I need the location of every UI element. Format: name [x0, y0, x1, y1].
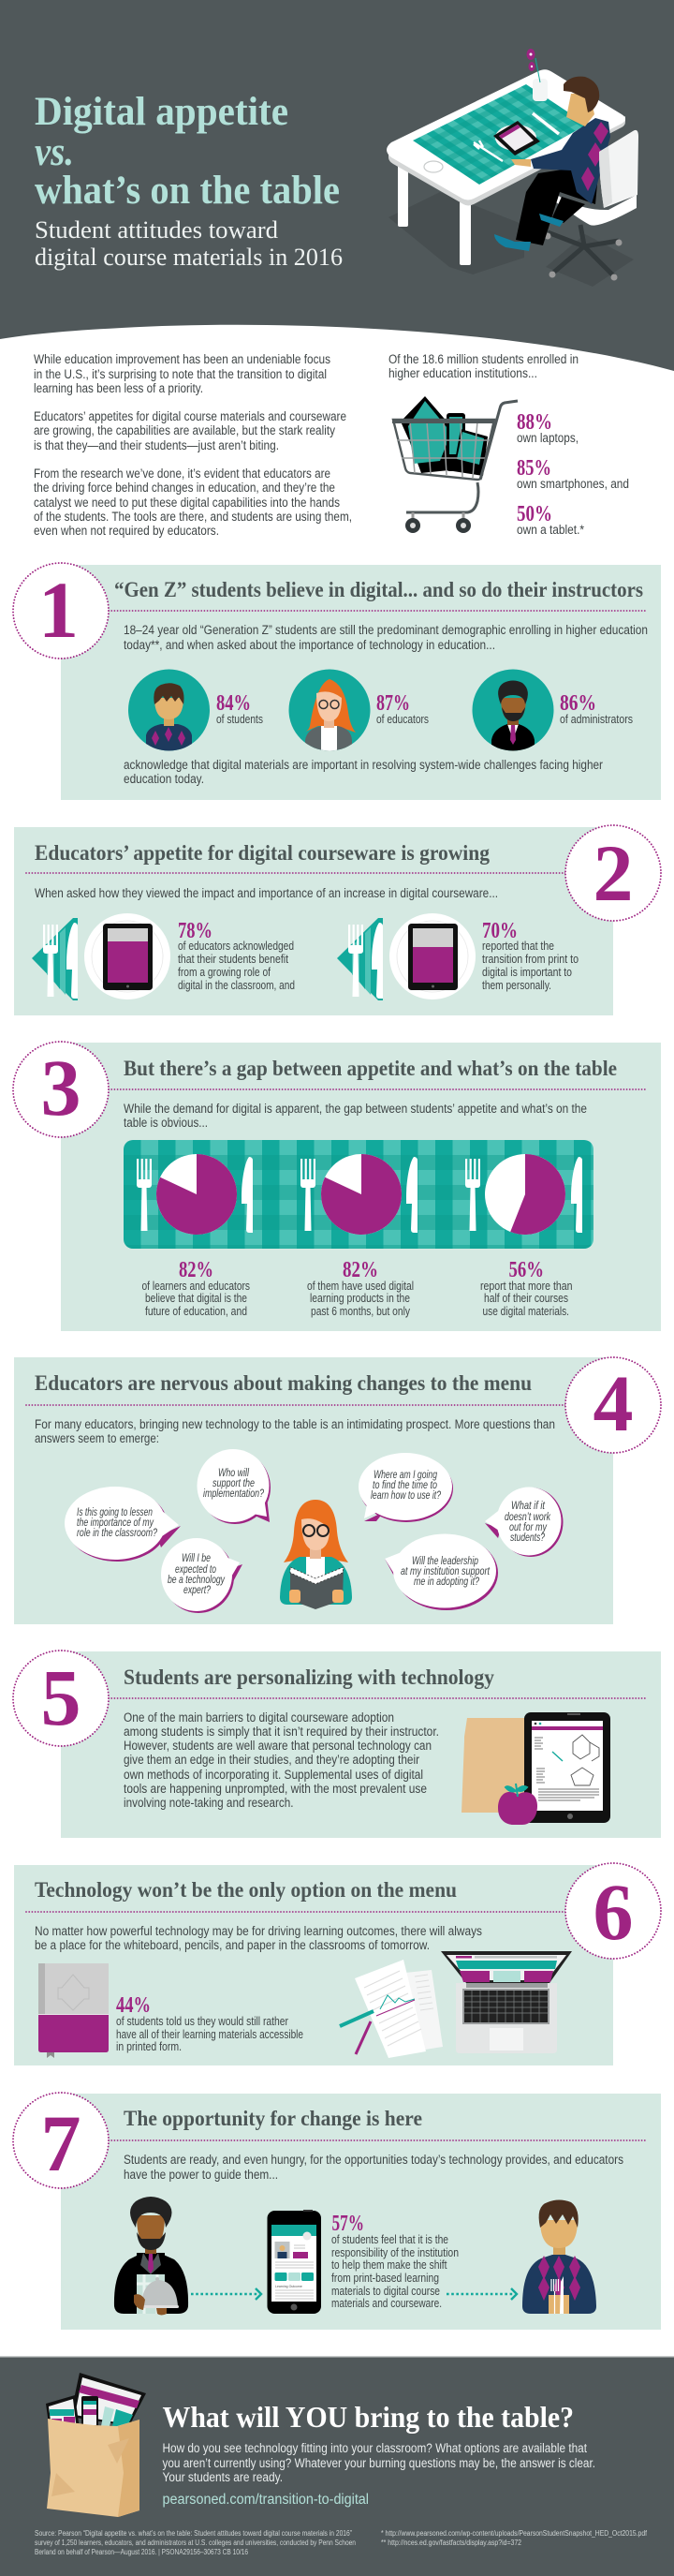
intro text block: in the U.S., it’s surprising to note that the transition to digital — [34, 367, 327, 381]
arrow: waiter to phone — [191, 2288, 261, 2300]
speech bubble: technology expert: expert? — [183, 1583, 211, 1596]
number badge 7: 7 — [41, 2098, 81, 2188]
number badge 3: 3 — [41, 1043, 81, 1133]
stat: 70% reported: transition from print to — [482, 952, 579, 966]
intro text block — [34, 352, 352, 538]
stat: 82% of learners: 82% — [179, 1258, 213, 1282]
stat: 78% of educators: of educators acknowledged — [178, 939, 294, 953]
icon: educator reading book — [280, 1500, 352, 1609]
icon: student avatar — [128, 669, 210, 751]
stat: 70% reported: digital is important to — [482, 965, 572, 979]
call to action heading: What will YOU bring to the table? — [163, 2400, 574, 2434]
icon: grocery bag with devices — [46, 2373, 146, 2517]
stat: 44% of students: have all of their learning materials accessible — [116, 2027, 303, 2041]
stat: 57% of students: responsibility of the institution — [331, 2245, 459, 2259]
icon: administrator avatar — [472, 669, 554, 751]
stat: 56% report: 56% — [509, 1258, 544, 1282]
stat: 82% used digital: 82% — [343, 1258, 378, 1282]
stat: 57% of students: materials to digital course — [331, 2284, 440, 2298]
icon: educator avatar — [288, 669, 371, 751]
heading: Students are personalizing with technology — [124, 1666, 494, 1689]
number badge 5 — [13, 1651, 109, 1746]
arrow: phone to student — [447, 2288, 517, 2300]
stat: 57% of students: 57% — [331, 2212, 364, 2236]
closing text: education today. — [124, 772, 204, 786]
stat: 82% used digital: past 6 months, but only — [311, 1304, 410, 1318]
speech bubble: find the time: learn how to use it? — [371, 1488, 441, 1502]
stat: 44% of students — [116, 1993, 303, 2053]
stat: 84% of students — [216, 691, 263, 726]
speech bubble: who will support — [197, 1449, 271, 1524]
speech bubble: find the time: to find the time to — [373, 1478, 437, 1491]
intro text: today**, and when asked about the importance of technology in education... — [124, 638, 495, 652]
stat: 70% reported: 70% — [482, 919, 518, 943]
intro text block: While education improvement has been an undeniable focus — [34, 352, 330, 366]
speech bubble: importance of role: the importance of my — [77, 1516, 154, 1529]
stat: 78% of educators: digital in the classroom, and — [178, 978, 295, 992]
website link: pearsoned.com/transition-to-digital — [163, 2492, 369, 2508]
intro text block: Educators’ appetites for digital course materials and courseware — [34, 409, 346, 423]
stat: 78% of educators: 78% — [178, 919, 212, 943]
number badge 7 — [13, 2093, 109, 2188]
speech bubble: importance of role: role in the classroom? — [77, 1526, 157, 1539]
call to action text — [163, 2441, 595, 2484]
panel: section 2 — [14, 825, 661, 1015]
stat: 56% report: report that more than — [480, 1279, 573, 1293]
device ownership stats: own a tablet.* — [517, 523, 585, 537]
intro text: For many educators, bringing new technology to the table is an intimidating prospect. More questions than — [35, 1417, 555, 1431]
stat: 57% of students — [331, 2212, 459, 2310]
stat: 82% of learners: of learners and educators — [142, 1279, 250, 1293]
intro text — [124, 2153, 623, 2182]
speech bubble: leadership support — [385, 1534, 498, 1610]
icon: place setting with tablet 70% — [337, 913, 476, 1000]
stat: 57% of students: materials and courseware. — [331, 2296, 442, 2310]
stat: 78% of educators — [178, 919, 295, 992]
stat: 56% report — [480, 1258, 573, 1318]
stat: 56% report: use digital materials. — [483, 1304, 569, 1318]
stat: 87% of educators — [376, 691, 429, 726]
device ownership intro: Of the 18.6 million students enrolled in — [388, 352, 579, 366]
intro text — [35, 1924, 482, 1952]
device ownership stats — [517, 410, 629, 537]
stat: 87% of educators: of educators — [376, 712, 429, 726]
device ownership intro: higher education institutions... — [388, 366, 537, 380]
intro text: have the power to guide them... — [124, 2168, 278, 2182]
header illustration: student at digital table — [387, 49, 638, 287]
speech bubble: leadership support: Will the leadership — [412, 1554, 478, 1567]
speech bubble: doesn't work out — [485, 1488, 564, 1557]
stat: 86% of administrators — [560, 691, 633, 726]
stat: 86% of administrators: of administrators — [560, 712, 633, 726]
stat: 86% of administrators: 86% — [560, 691, 596, 716]
speech bubble: technology expert — [161, 1538, 242, 1613]
footer background — [0, 2357, 674, 2576]
icon: phone with learning app — [268, 2210, 321, 2314]
source note: survey of 1,250 learners, educators, and administrators at U.S. colleges and universities, conducted by Penn Schoen — [35, 2539, 356, 2547]
heading: The opportunity for change is here — [124, 2107, 422, 2130]
stat: 78% of educators: that their students benefit — [178, 952, 288, 966]
device ownership stats: own laptops, — [517, 431, 579, 445]
intro text: No matter how powerful technology may be for driving learning outcomes, there will always — [35, 1924, 482, 1938]
stat: 87% of educators: 87% — [376, 691, 410, 716]
body text: give them an edge in their studies, and they’re adopting their — [124, 1753, 419, 1767]
speech bubble: find the time: Where am I going — [374, 1468, 437, 1481]
device ownership intro — [388, 352, 579, 380]
pie chart: 56% report — [465, 1154, 582, 1235]
footnotes — [381, 2529, 648, 2547]
tablecloth with pie chart plates — [124, 1140, 593, 1249]
intro text block: learning has been less of a priority. — [34, 381, 203, 395]
title: Digital appetite — [35, 90, 288, 134]
intro text block: the driving force behind changes in education, and they’re the — [34, 481, 335, 495]
title — [35, 90, 340, 213]
speech bubble: doesn't work out: doesn’t work — [505, 1510, 551, 1523]
intro text — [124, 623, 648, 652]
panel: section 3 — [13, 1042, 661, 1331]
intro text block: even when not required by educators. — [34, 524, 219, 538]
body text: One of the main barriers to digital courseware adoption — [124, 1710, 394, 1725]
stat: 44% of students: 44% — [116, 1993, 151, 2018]
heading: Educators are nervous about making changes to the menu — [35, 1371, 532, 1395]
speech bubble: doesn't work out: What if it — [511, 1499, 546, 1512]
intro text — [124, 1102, 587, 1130]
stat: 70% reported: them personally. — [482, 978, 551, 992]
panel: section 1 — [13, 563, 661, 800]
speech bubble: who will support: implementation? — [203, 1487, 264, 1500]
stat: 57% of students: to help them make the shift — [331, 2258, 447, 2272]
speech bubble: who will support: support the — [212, 1476, 255, 1489]
closing text: acknowledge that digital materials are important in resolving system-wide challenges facing higher — [124, 758, 603, 772]
body text — [124, 1710, 439, 1810]
panel: section 7 — [13, 2093, 661, 2330]
heading: But there’s a gap between appetite and what’s on the table — [124, 1057, 617, 1080]
icon: lunch bag, tablet and apple — [462, 1712, 610, 1825]
icon: printed book — [38, 1963, 109, 2058]
stat: 82% used digital: learning products in the — [310, 1291, 410, 1305]
speech bubble: doesn't work out: students? — [510, 1531, 545, 1544]
number badge 2 — [565, 825, 661, 921]
panel: section 4 — [14, 1357, 661, 1624]
speech bubble: doesn't work out: out for my — [509, 1520, 548, 1533]
panel: section 6 — [14, 1863, 661, 2065]
stat: 70% reported: reported that the — [482, 939, 554, 953]
number badge 2: 2 — [593, 828, 633, 918]
icon: phone with learning app: Learning Outcome — [275, 2285, 302, 2288]
speech bubble: importance of role: Is this going to lessen — [77, 1505, 153, 1518]
subtitle: digital course materials in 2016 — [35, 244, 343, 271]
intro text: answers seem to emerge: — [35, 1431, 159, 1445]
intro text — [35, 1417, 555, 1445]
title: what’s on the table — [35, 169, 340, 213]
speech bubble: leadership support: me in adopting it? — [414, 1575, 479, 1588]
device ownership stats: 88% — [517, 410, 552, 435]
title: vs. — [35, 130, 74, 174]
number badge 5: 5 — [41, 1652, 81, 1742]
intro text block: catalyst we need to put these digital capabilities into the hands — [34, 496, 340, 510]
intro text block: of the students. The tools are there, and students are using them, — [34, 510, 352, 524]
body text: among students is simply that it isn’t required by their instructor. — [124, 1725, 439, 1739]
number badge 4: 4 — [593, 1358, 633, 1448]
closing text — [124, 758, 603, 786]
speech bubble: leadership support: at my institution support — [401, 1564, 490, 1577]
call to action text: you aren’t currently using? Whatever your burning questions may be, the answer is clear. — [163, 2456, 595, 2470]
number badge 6: 6 — [593, 1867, 633, 1957]
device ownership stats: own smartphones, and — [517, 477, 629, 491]
stat: 82% used digital — [307, 1258, 414, 1318]
stat: 82% of learners: future of education, and — [145, 1304, 247, 1318]
device ownership stats: 85% — [517, 456, 551, 481]
source note — [35, 2529, 356, 2556]
icon: shopping cart with devices — [392, 396, 518, 533]
intro text: table is obvious... — [124, 1116, 208, 1130]
body text: tools are happening unprompted, with the most prevalent use — [124, 1782, 427, 1796]
stat: 82% used digital: of them have used digital — [307, 1279, 414, 1293]
heading: Educators’ appetite for digital courseware is growing — [35, 841, 490, 865]
icon: student with fork and knife — [522, 2199, 596, 2314]
pie chart: 82% used — [300, 1154, 418, 1235]
stat: 44% of students: of students told us they would still rather — [116, 2014, 289, 2028]
speech bubble: find the time — [359, 1453, 453, 1522]
panel: section 5 — [13, 1651, 661, 1838]
number badge 3 — [13, 1042, 109, 1137]
number badge 1 — [13, 563, 109, 659]
speech bubble: technology expert: be a technology — [168, 1573, 226, 1586]
icon: laptop — [441, 1951, 572, 2053]
number badge 6 — [565, 1863, 661, 1959]
stat: 44% of students: in printed form. — [116, 2039, 182, 2053]
speech bubble: who will support: Who will — [218, 1466, 249, 1479]
stat: 70% reported — [482, 919, 579, 992]
stat: 78% of educators: from a growing role of — [178, 965, 271, 979]
pie chart: 82% believe — [137, 1154, 253, 1235]
stat: 84% of students: 84% — [216, 691, 251, 716]
icon: waiter with cloche — [114, 2197, 188, 2316]
body text: involving note-taking and research. — [124, 1796, 294, 1810]
call to action text: How do you see technology fitting into your classroom? What options are available that — [163, 2441, 587, 2455]
source note: Berland on behalf of Pearson—August 2016. | PSONA29156–30673 CB 10/16 — [35, 2548, 248, 2556]
intro text: When asked how they viewed the impact and importance of an increase in digital courseware... — [35, 886, 498, 900]
source note: Source: Pearson “Digital appetite vs. what’s on the table: Student attitudes toward digital course materials in 2016” — [35, 2529, 352, 2538]
number badge 1: 1 — [38, 565, 79, 655]
intro text block: From the research we’ve done, it’s evident that educators are — [34, 466, 330, 481]
intro text block: are growing, the capabilities are available, but the stark reality — [34, 423, 335, 437]
stat: 82% of learners — [142, 1258, 250, 1318]
number badge 4 — [565, 1357, 661, 1453]
body text: own methods of incorporating it. Supplemental uses of digital — [124, 1768, 423, 1782]
stat: 56% report: half of their courses — [484, 1291, 568, 1305]
stat: 57% of students: from print-based learning — [331, 2271, 439, 2285]
device ownership stats: 50% — [517, 502, 552, 526]
subtitle: Student attitudes toward — [35, 216, 278, 244]
call to action text: Your students are ready. — [163, 2470, 283, 2484]
header background — [0, 0, 674, 371]
icon: papers and pencils — [340, 1960, 443, 2058]
speech bubble: technology expert: expected to — [175, 1562, 216, 1576]
subtitle — [35, 216, 343, 271]
speech bubble: importance of role — [65, 1487, 181, 1562]
stat: 84% of students: of students — [216, 712, 263, 726]
icon: place setting with tablet 78% — [32, 913, 170, 1000]
stat: 57% of students: of students feel that it is the — [331, 2232, 448, 2246]
intro text: While the demand for digital is apparent, the gap between students’ appetite and what’s on the — [124, 1102, 587, 1116]
speech bubble: technology expert: Will I be — [182, 1551, 211, 1564]
footnotes: ** http://nces.ed.gov/fastfacts/display.asp?id=372 — [381, 2539, 521, 2547]
heading: Technology won’t be the only option on the menu — [35, 1878, 457, 1902]
body text: However, students are well aware that personal technology can — [124, 1739, 432, 1753]
intro text: be a place for the whiteboard, pencils, and paper in the classrooms of tomorrow. — [35, 1938, 430, 1952]
intro text block: is that they—and their students—just aren’t biting. — [34, 438, 279, 452]
stat: 82% of learners: believe that digital is the — [145, 1291, 247, 1305]
